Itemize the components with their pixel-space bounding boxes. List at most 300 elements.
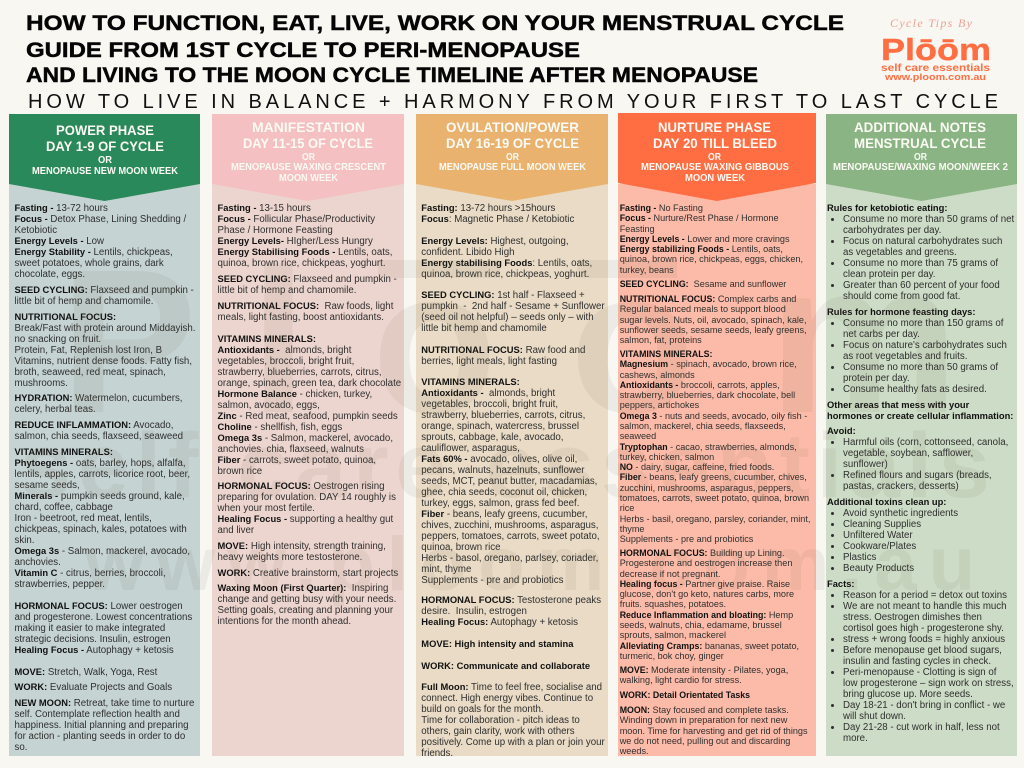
text: moon: moon. Time for harvesting and get rid of things — [620, 726, 808, 736]
text: hormonal focus: Healing focus - Partner give praise. Raise — [620, 579, 790, 589]
logo: Ploom self care essentials: Cycle Tips By — [890, 16, 973, 30]
text: hormonal focus: preparing for ovulation. DAY 14 roughly is — [218, 492, 396, 503]
text: fasting and focus: Fasting - 13-72 hours — [14, 203, 108, 214]
header: additional notes — [0, 0, 1024, 202]
text: vitamins minerals: Hormone Balance - chicken, turkey, — [218, 389, 372, 400]
text: nutritional focus — [421, 345, 585, 367]
text: seed cycling — [14, 285, 194, 307]
text: hormonal focus: fruits. squashes, potatoes. — [620, 599, 726, 609]
text: hormonal focus: HORMONAL FOCUS: Testosterone peaks — [421, 595, 601, 606]
text: facts: stress. Oestrogen dimishes then — [843, 612, 982, 623]
text: vitamins minerals: quinoa, brown rice — [421, 542, 500, 553]
title: AND LIVING TO THE MOON CYCLE TIMELINE AFTER MENOPAUSE — [26, 63, 758, 87]
header: manifestation: MOON WEEK — [279, 173, 338, 184]
text: move — [218, 541, 386, 563]
text: fasting and focus: chocolate, eggs. — [14, 269, 85, 280]
text: fasting and focus: Energy Levels - Lower and more cravings — [620, 234, 790, 244]
header: power phase: MENOPAUSE NEW MOON WEEK — [32, 166, 178, 177]
text: ketobiotic rules — [827, 203, 1014, 302]
text: nutritional focus: no snacking on fruit. — [14, 334, 101, 345]
text: hormonal focus — [421, 595, 601, 628]
text: energy: confident. Libido High — [421, 247, 514, 258]
watermark: Ploom logo: m — [768, 217, 959, 458]
header: nurture phase: OR — [708, 152, 721, 163]
text: waxing moon: Waxing Moon (First Quarter): Inspiring — [218, 583, 388, 594]
text: seed cycling: SEED CYCLING: 1st half - Flaxseed + — [421, 290, 585, 301]
text: waxing moon: Setting goals, creating and planning your — [218, 605, 393, 616]
text: avoid: pastas, crackers, desserts) — [843, 481, 959, 492]
text: vitamins minerals: Minerals - pumpkin seeds ground, kale, — [14, 491, 185, 502]
text: vitamins minerals: pecans, walnuts, hazelnuts, sunflower — [421, 465, 584, 476]
watermark: Ploom logo: self care essentials — [20, 415, 990, 517]
header: ovulation power: DAY 16-19 OF CYCLE — [446, 135, 579, 151]
header: ovulation power — [416, 114, 608, 201]
text: fasting and focus: Energy Stability - Lentils, chickpeas, — [14, 247, 173, 258]
text: hormonal focus: making it easier to make integrated — [14, 623, 165, 634]
text: ketobiotic rules: Consume no more than 50 grams of net — [843, 214, 1014, 225]
text: nutritional focus: salmon, fat, proteins — [620, 335, 702, 345]
text: vitamins minerals: salmon, avocado, eggs, — [218, 400, 320, 411]
header: manifestation — [212, 114, 404, 201]
text: vitamins minerals: anchovies. chia, flaxseed, walnuts — [218, 444, 364, 455]
text: vitamins minerals: Fiber - beans, leafy greens, cucumber, — [421, 509, 587, 520]
text: fasting and focus: Phase / Hormone Feasting — [218, 225, 333, 236]
text: new moon: so. — [14, 742, 27, 753]
text: hormonal focus: seeds, walnuts, chia, edamame, brussel — [620, 620, 782, 630]
text: hormonal focus: Progesterone and oestrogen increase then — [620, 558, 792, 568]
text: other areas: hormones or create cellular inflammation: — [827, 411, 1013, 421]
text: fasting and focus: Feasting — [620, 224, 655, 234]
header: additional notes: OR — [914, 152, 927, 163]
text: hormone feasting rules: protein per day. — [843, 373, 910, 384]
text: fasting and focus: quinoa, brown rice, chickpeas, yoghurt. — [218, 258, 386, 269]
text: move: heavy weights more testosterone. — [218, 552, 362, 563]
panel background — [618, 184, 816, 756]
text: seed cycling — [421, 290, 605, 334]
text: vitamins minerals: orange, spinach, green tea, dark chocolate — [218, 378, 401, 389]
text: additional toxins: Additional toxins clean up: — [827, 497, 946, 507]
text: move: MOVE: Moderate intensity - Pilates, yoga, — [620, 665, 788, 675]
text: energy: Energy Levels: Highest, outgoing, — [421, 236, 569, 247]
text: work: WORK: Communicate and collaborate — [421, 661, 590, 671]
text: vitamins minerals: anchovies. — [14, 557, 61, 568]
text: ketobiotic rules: carbohydrates per day. — [843, 225, 941, 236]
text: nutritional focus: NUTRITIONAL FOCUS: Raw food and — [421, 345, 585, 356]
text: vitamins minerals: Vitamin C - citrus, berries, broccoli, — [14, 568, 166, 579]
header: nurture phase: DAY 20 TILL BLEED — [653, 135, 777, 151]
text: energy — [421, 236, 592, 280]
text: hormone feasting rules: Focus on nature's carbohydrates such — [843, 340, 1007, 351]
text: vitamins minerals: cashews, almonds — [620, 370, 695, 380]
text: nutritional focus: mushrooms. — [14, 378, 68, 389]
text: fasting and focus: Fasting: 13-72 hours >15hours — [421, 203, 555, 214]
text: vitamins minerals: VITAMINS MINERALS: — [421, 377, 520, 387]
text: avoid: Harmful oils (corn, cottonseed, canola, — [843, 437, 1008, 448]
text: hormonal focus: HORMONAL FOCUS: Building up Lining. — [620, 548, 784, 558]
text: move: MOVE: Stretch, Walk, Yoga, Rest — [14, 667, 157, 678]
text: work: WORK: Evaluate Projects and Goals — [14, 682, 172, 693]
text: fasting and focus — [14, 203, 186, 280]
text: ketobiotic rules: Consume no more than 75 grams of — [843, 258, 998, 269]
text: fasting and focus: Fasting - No Fasting — [620, 203, 703, 213]
header: power phase — [9, 114, 200, 201]
text: avoid: sunflower) — [843, 459, 888, 470]
subtitle: HOW TO LIVE IN BALANCE + HARMONY FROM YOUR FIRST TO LAST CYCLE — [28, 91, 998, 113]
text: fasting and focus: Ketobiotic — [14, 225, 57, 236]
text: move: MOVE: High intensity and stamina — [421, 639, 573, 649]
text: vitamins minerals: Omega 3s - Salmon, mackerel, avocado, — [14, 546, 190, 557]
text: nutritional focus: berries, light meals, light fasting — [421, 356, 557, 367]
text: vitamins minerals — [421, 377, 600, 586]
logo: Ploom self care essentials: Plōōm — [881, 32, 991, 67]
text: reduce inflammation: REDUCE INFLAMMATION: Avocado, — [14, 420, 173, 431]
text: hormonal focus: sprouts, salmon, mackerel — [620, 630, 726, 640]
text: hormonal focus: Reduce Inflammation and bloating: Hemp — [620, 610, 793, 620]
text: ketobiotic rules: Rules for ketobiotic eating: — [827, 203, 947, 213]
text: hormone feasting rules: Consume no more than 50 grams of — [843, 362, 998, 373]
header: nurture phase — [618, 113, 816, 201]
text: vitamins minerals: Antioxidants - almonds, bright — [421, 388, 555, 399]
text: hydration: celery, herbal teas. — [14, 404, 96, 415]
title — [26, 11, 844, 87]
text: vitamins minerals: vegetables, broccoli, bright fruit, — [218, 356, 354, 367]
text: hormonal focus: and liver — [218, 525, 254, 536]
text: vitamins minerals: turkey, eggs, salmon, grass fed beef. — [421, 498, 579, 509]
text: fasting and focus: Focus - Detox Phase, Lining Shedding / — [14, 214, 186, 225]
text: additional toxins: Plastics — [843, 552, 876, 563]
text: moon: Winding down in preparation for next new — [620, 715, 787, 725]
text: facts — [827, 579, 1014, 744]
panel background — [212, 184, 404, 756]
watermark: Ploom logo: l — [250, 227, 307, 456]
header: additional notes: ADDITIONAL NOTES — [854, 119, 986, 135]
text: seed cycling: little bit hemp and chamomile — [421, 323, 547, 334]
text: hormone feasting rules: Rules for hormone feasting days: — [827, 307, 976, 317]
text: vitamins minerals: Herbs - basol, oregano, parlsey, coriader, — [421, 553, 598, 564]
text: fasting and focus: quinoa, brown rice, chickpeas, eggs, chicken, — [620, 254, 803, 264]
text: vitamins minerals: chickpeas, spinach, kales, potatoes with — [14, 524, 187, 535]
header: nurture phase: MENOPAUSE WAXING GIBBOUS — [641, 162, 789, 173]
text: vitamins minerals: Iron - beetroot, red meat, lentils, — [14, 513, 152, 524]
header: manifestation: OR — [302, 152, 315, 163]
text: vitamins minerals: tomatoes, carrots, sweet potato, quinoa, brown — [620, 493, 809, 503]
text: nutritional focus — [620, 294, 807, 345]
text: full moon: Time for collaboration - pitch ideas to — [421, 715, 580, 726]
text: vitamins minerals: salmon, mackerel, chia seeds, flaxseeds, — [620, 421, 786, 431]
text: hormone feasting rules: Consume healthy fats as desired. — [843, 384, 987, 395]
text: reduce inflammation: salmon, chia seeds, flaxseed, seaweed — [14, 431, 183, 442]
text: hydration: HYDRATION: Watermelon, cucumbers, — [14, 393, 182, 404]
text: hormonal focus — [218, 481, 396, 536]
text: seed cycling: pumpkin - 2nd half - Sesame + Sunflower — [421, 301, 605, 312]
text: hormonal focus: strategic decisions. Insulin, estrogen — [14, 634, 171, 645]
text: facts: will shut down. — [843, 711, 906, 722]
text: hormone feasting rules: as root vegetables and fruits. — [843, 351, 967, 362]
text: work: WORK: Creative brainstorm, start projects — [218, 568, 398, 579]
text: nutritional focus: NUTRITIONAL FOCUS: Complex carbs and — [620, 294, 796, 304]
text: new moon: NEW MOON: Retreat, take time to nurture — [14, 698, 194, 709]
text: hormonal focus: HORMONAL FOCUS: Oestrogen rising — [218, 481, 385, 492]
header: manifestation: MANIFESTATION — [252, 119, 365, 135]
text: facts: Facts: — [827, 579, 855, 589]
text: nutritional focus — [218, 301, 394, 323]
text: energy: quinoa, brown rice, chickpeas, yoghurt. — [421, 269, 589, 280]
text: fasting and focus: turkey, beans — [620, 265, 674, 275]
text: vitamins minerals: sprouts, cabbage, kale, avocado, — [421, 432, 563, 443]
text: seed cycling: SEED CYCLING: Sesame and sunflower — [620, 279, 786, 289]
text: nutritional focus: sugar levels. Nuts, oil, avocado, spinach, kale, — [620, 315, 807, 325]
text: hormonal focus: Alleviating Cramps: bananas, sweet potato, — [620, 641, 799, 651]
text: ketobiotic rules: clean protein per day. — [843, 269, 935, 280]
text: full moon: others, gain clarity, work with others — [421, 726, 575, 737]
text: vitamins minerals: strawberry, blueberries, dark chocolate, bell — [620, 390, 795, 400]
text: vitamins minerals: Antioxidants - broccoli, carrots, apples, — [620, 380, 780, 390]
text: vitamins minerals: Zinc - Red meat, seafood, pumpkin seeds — [218, 411, 398, 422]
text: vitamins minerals: Phytoegens - oats, barley, hops, alfalfa, — [14, 458, 186, 469]
text: seed cycling: SEED CYCLING: Flaxseed and pumpkin - — [14, 285, 194, 296]
text: vitamins minerals: mint, thyme — [421, 564, 471, 575]
text: nutritional focus: Break/Fast with protein around Middayish. — [14, 323, 195, 334]
text: vitamins minerals: Supplements - pre and probiotics — [421, 575, 563, 586]
text: vitamins minerals: strawberries, pepper. — [14, 579, 105, 590]
text: full moon — [421, 682, 605, 759]
text: hormonal focus: Healing Focus - Autophagy + ketosis — [14, 645, 174, 656]
text: fasting and focus — [218, 203, 392, 269]
text: vitamins minerals: ghee, chia seeds, coconut oil, chicken, — [421, 487, 587, 498]
text: facts: Before menopause get blood sugars, — [843, 645, 1002, 656]
text: fasting and focus: Focus - Nurture/Rest Phase / Hormone — [620, 213, 779, 223]
text: fasting and focus: Fasting - 13-15 hours — [218, 203, 311, 214]
text: vitamins minerals: turkey, chicken, salmon — [620, 452, 714, 462]
text: vitamins minerals: cauliflower, asparagus, — [421, 443, 520, 454]
text: hormone feasting rules: Consume no more than 150 grams of — [843, 318, 1003, 329]
title: GUIDE FROM 1ST CYCLE TO PERI-MENOPAUSE — [26, 38, 580, 62]
text: vitamins minerals: Tryptophan - cacao, strawberries, almonds, — [620, 442, 797, 452]
text: hormonal focus: and progesterone. Lowest concentrations — [14, 612, 192, 623]
text: nutritional focus: meals, light fasting, boost antioxidants. — [218, 312, 384, 323]
text: new moon: happiness. Initial planning and preparing — [14, 720, 188, 731]
panel background — [416, 184, 608, 756]
text: waxing moon: change and getting busy with your needs. — [218, 594, 396, 605]
text: avoid — [827, 426, 1008, 492]
text: waxing moon — [218, 583, 396, 627]
text: hormonal focus: glucose, don't go keto, natures carbs, more — [620, 589, 794, 599]
text: vitamins minerals: Fiber - beans, leafy greens, cucumber, chives, — [620, 472, 807, 482]
text: fasting and focus: Focus: Magnetic Phase / Ketobiotic — [421, 214, 574, 225]
watermark: Ploom logo: P — [60, 227, 197, 456]
header: manifestation: MENOPAUSE WAXING CRESCENT — [231, 162, 386, 173]
text: vitamins minerals: Fats 60% - avocado, olives, olive oil, — [421, 454, 577, 465]
text: vitamins minerals: chard, coffee, cabbage — [14, 502, 113, 513]
header: manifestation: DAY 11-15 OF CYCLE — [243, 135, 373, 151]
text: ketobiotic rules: Greater than 60 percent of your food — [843, 280, 1000, 291]
text: vitamins minerals: seaweed — [620, 431, 656, 441]
text: fasting and focus: Energy Levels- HIgher/Less Hungry — [218, 236, 373, 247]
text: vitamins minerals: skin. — [14, 535, 34, 546]
text: additional toxins: Avoid synthetic ingredients — [843, 508, 958, 519]
text: fasting and focus — [620, 203, 803, 275]
text: fasting and focus: Focus - Follicular Phase/Productivity — [218, 214, 375, 225]
text: vitamins minerals: Magnesium - spinach, avocado, brown rice, — [620, 359, 797, 369]
text: hormonal focus: HORMONAL FOCUS: Lower oestrogen — [14, 601, 183, 612]
text: moon — [620, 705, 808, 756]
text: hormonal focus: decrease if not pregnant. — [620, 569, 720, 579]
text: additional toxins: Cleaning Supplies — [843, 519, 921, 530]
text: seed cycling: little bit of hemp and chamomile. — [218, 285, 356, 296]
panel background — [826, 184, 1017, 756]
header: additional notes: MENOPAUSE/WAXING MOON/WEEK 2 — [833, 162, 1009, 173]
text: additional toxins: Unfiltered Water — [843, 530, 913, 541]
text: seed cycling: SEED CYCLING: Flaxseed and pumpkin - — [218, 274, 397, 285]
text: nutritional focus: sunflower seeds, sesame seeds, leafy greens, — [620, 325, 807, 335]
text: vitamins minerals: VITAMINS MINERALS: — [218, 334, 316, 344]
text: facts: low progesterone – sign work on stress, — [843, 678, 1014, 689]
watermark: Ploom logo: www.ploom.com.au — [84, 522, 975, 607]
text: work: WORK: Detail Orientated Tasks — [620, 690, 750, 700]
text: vitamins minerals: Supplements - pre and probiotics — [620, 534, 753, 544]
text: vitamins minerals: sesame seeds, — [14, 480, 80, 491]
header: ovulation power: OR — [506, 152, 519, 163]
text: vitamins minerals: thyme — [620, 524, 644, 534]
text: facts: insulin and fasting cycles in check. — [843, 656, 991, 667]
text: new moon: for action - planting seeds in order to do — [14, 731, 185, 742]
text: full moon: build on goals for the month. — [421, 704, 544, 715]
text: vitamins minerals: chives, zucchini, mushrooms, asparagus, — [421, 520, 598, 531]
header: power phase: POWER PHASE — [56, 122, 154, 138]
text: additional toxins — [827, 497, 958, 574]
text: moon: we do not need, pulling out and discarding — [620, 736, 790, 746]
text: full moon: connect. High energy vibes. Continue to — [421, 693, 593, 704]
text: nutritional focus: broth, seaweed, red meat, spinach, — [14, 367, 166, 378]
header: nurture phase: MOON WEEK — [685, 173, 745, 184]
text: vitamins minerals: NO - dairy, sugar, caffeine, fried foods. — [620, 462, 774, 472]
header: power phase: OR — [98, 155, 112, 166]
text: reduce inflammation — [14, 420, 183, 442]
text: nutritional focus: Vitamins, nutrient dense foods. Fatty fish, — [14, 356, 192, 367]
title: HOW TO FUNCTION, EAT, LIVE, WORK ON YOUR MENSTRUAL CYCLE — [26, 11, 844, 35]
text: avoid: Refined flours and sugars (breads, — [843, 470, 992, 481]
text: full moon: positively. Come up with a plan or join your — [421, 737, 605, 748]
text: vitamins minerals: Antioxidants - almonds, bright — [218, 345, 351, 356]
watermark: Ploom logo: o — [570, 227, 695, 456]
text: nutritional focus: NUTRITIONAL FOCUS: — [14, 312, 116, 322]
text: hormonal focus: desire. Insulin, estrogen — [421, 606, 527, 617]
text: hormone feasting rules: net carbs per day. — [843, 329, 920, 340]
text: vitamins minerals: Choline - shellfish, fish, eggs — [218, 422, 342, 433]
text: additional toxins: Beauty Products — [843, 563, 914, 574]
text: move — [620, 665, 788, 685]
header: nurture phase: NURTURE PHASE — [658, 119, 771, 135]
text: avoid: Avoid: — [827, 426, 856, 436]
text: hormonal focus: turmeric, bok choy, ginger — [620, 651, 724, 661]
text: facts: Reason for a period = detox out toxins — [843, 590, 1007, 601]
text: nutritional focus: Regular balanced meals to support blood — [620, 304, 786, 314]
text: vitamins minerals: rice — [620, 503, 634, 513]
text: vitamins minerals: peppers, tomatoes, carrots, sweet potato, — [421, 531, 600, 542]
text: other areas — [827, 400, 1013, 422]
text: new moon — [14, 698, 194, 753]
header: power phase: DAY 1-9 OF CYCLE — [46, 138, 164, 154]
text: new moon: self. Contemplate reflection health and — [14, 709, 180, 720]
text: energy: Energy stabilising Foods: Lentils, oats, — [421, 258, 592, 269]
text: vitamins minerals: vegetables, broccoli, bright fruit, — [421, 399, 558, 410]
text: vitamins minerals: VITAMINS MINERALS: — [14, 447, 113, 457]
text: vitamins minerals: strawberry, blueberries, carrots, citrus, — [421, 410, 585, 421]
text: vitamins minerals: lentils, apples, carrots, licorice root, beer, — [14, 469, 190, 480]
text: hormonal focus — [620, 548, 799, 661]
text: avoid: vegetable, soybean, safflower, — [843, 448, 973, 459]
text: additional toxins: Cookware/Plates — [843, 541, 916, 552]
text: vitamins minerals: VITAMINS MINERALS: — [620, 349, 712, 359]
logo: Ploom self care essentials — [881, 16, 991, 83]
text: hormonal focus: Healing Focus - supporting a healthy gut — [218, 514, 393, 525]
text: nutritional focus — [14, 312, 195, 389]
text: full moon: friends. — [421, 748, 453, 759]
text: vitamins minerals — [218, 334, 401, 477]
text: seed cycling: (seed oil not helpful) – seeds only – with — [421, 312, 594, 323]
text: ketobiotic rules: as vegetables and greens. — [843, 247, 957, 258]
text: vitamins minerals: Omega 3 - nuts and seeds, avocado, oily fish - — [620, 411, 807, 421]
text: facts: We are not meant to handle this much — [843, 601, 1007, 612]
header: additional notes: MENSTRUAL CYCLE — [854, 135, 986, 151]
text: vitamins minerals: strawberry, blueberries, carrots, citrus, — [218, 367, 382, 378]
text: vitamins minerals: seeds, MCT, peanut butter, macadamias, — [421, 476, 597, 487]
header: ovulation power: OVULATION/POWER — [446, 119, 579, 135]
text: facts: bring glucose up. More seeds. — [843, 689, 973, 700]
text: hormonal focus — [14, 601, 192, 656]
text: other areas: Other areas that mess with your — [827, 400, 969, 410]
text: facts: Peri-menopause - Clotting is sign of — [843, 667, 996, 678]
text: vitamins minerals: zucchini, mushrooms, asparagus, peppers, — [620, 483, 793, 493]
panel background — [9, 184, 200, 756]
logo: Ploom self care essentials: www.ploom.com.au — [884, 72, 986, 83]
text: facts: cortisol goes high - progesterone shy. — [843, 623, 1004, 634]
text: moon: MOON: Stay focused and complete tasks. — [620, 705, 789, 715]
text: vitamins minerals: orange, spinach, watercress, brussel — [421, 421, 579, 432]
text: hormone feasting rules — [827, 307, 1007, 395]
text: facts: Day 18-21 - don't bring in conflict - we — [843, 700, 1005, 711]
text: fasting and focus: Energy Stabilising Foods - Lentils, oats, — [218, 247, 392, 258]
text: seed cycling — [218, 274, 397, 296]
text: full moon: Full Moon: Time to feel free, socialise and — [421, 682, 602, 693]
text: ketobiotic rules: Focus on natural carbohydrates such — [843, 236, 1002, 247]
text: facts: stress + wrong foods = highly anxious — [843, 634, 1005, 645]
text: vitamins minerals: Fiber - carrots, sweet potato, quinoa, — [218, 455, 376, 466]
text: hormonal focus: Healing Focus: Autophagy + ketosis — [421, 617, 578, 628]
text: seed cycling: little bit of hemp and chamomile. — [14, 296, 153, 307]
text: waxing moon: intentions for the month ahead. — [218, 616, 351, 627]
logo: Ploom self care essentials: self care essentials — [881, 62, 990, 74]
text: vitamins minerals — [14, 447, 190, 590]
text: move: MOVE: High intensity, strength training, — [218, 541, 386, 552]
header: ovulation power: MENOPAUSE FULL MOON WEEK — [439, 162, 586, 173]
text: nutritional focus: NUTRITIONAL FOCUS: Raw foods, light — [218, 301, 393, 312]
text: vitamins minerals — [620, 349, 810, 544]
text: fasting and focus: Energy stabilizing Foods - Lentils, oats, — [620, 244, 783, 254]
text: vitamins minerals: Herbs - basil, oregano, parsley, coriander, mint, — [620, 514, 810, 524]
text: facts: more. — [843, 733, 868, 744]
text: move: walking, light cardio for stress. — [620, 675, 742, 685]
text: nutritional focus: Protein, Fat, Replenish lost Iron, B — [14, 345, 162, 356]
text: fasting and focus — [421, 203, 574, 225]
text: vitamins minerals: brown rice — [218, 466, 262, 477]
text: vitamins minerals: Omega 3s - Salmon, mackerel, avocado, — [218, 433, 393, 444]
text: fasting and focus: Energy Levels - Low — [14, 236, 104, 247]
text: ketobiotic rules: should come from good fat. — [843, 291, 960, 302]
text: vitamins minerals: peppers, artichokes — [620, 400, 699, 410]
text: moon: weeds. — [620, 746, 649, 756]
watermark: Ploom logo: o — [372, 227, 497, 456]
